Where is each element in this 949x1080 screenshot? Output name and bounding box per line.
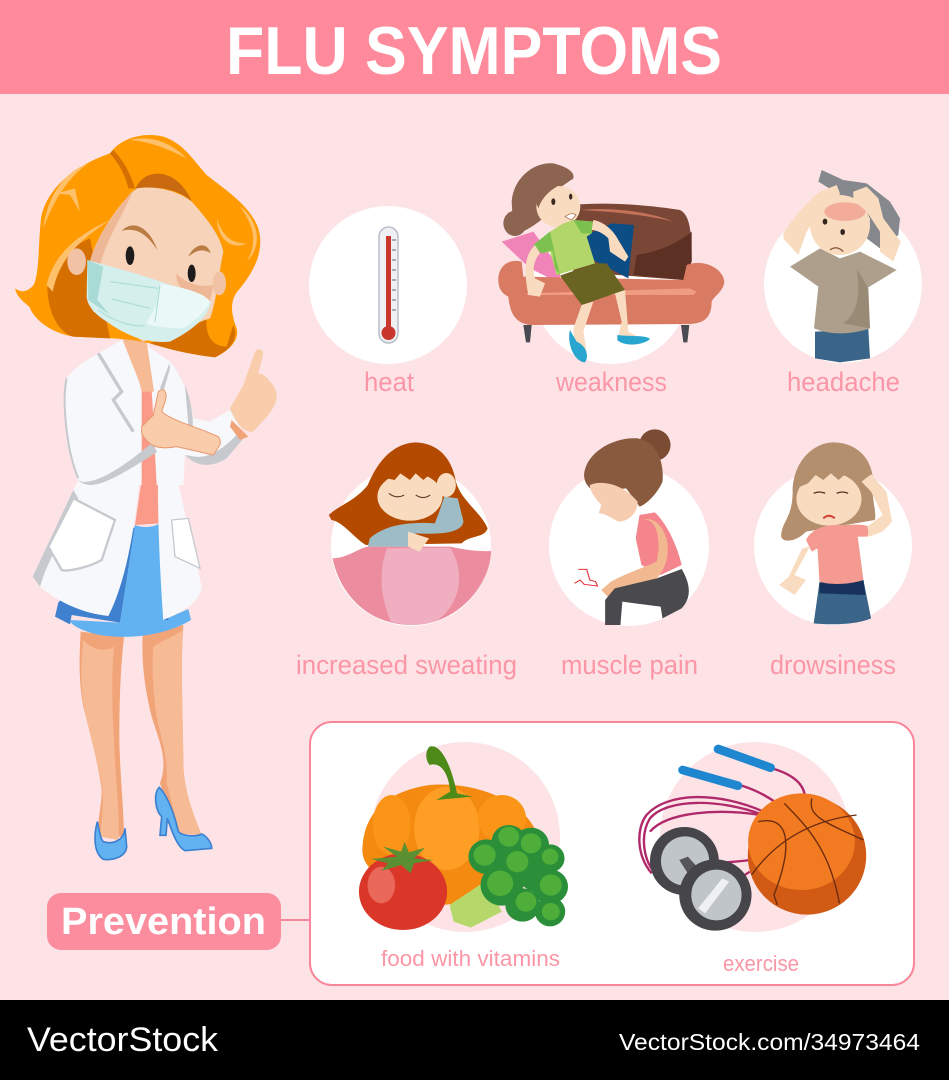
icon: jump rope <box>639 749 805 878</box>
symptom: weakness <box>498 163 724 397</box>
symptom: weakness: weakness <box>555 367 667 397</box>
illustration: person on sofa <box>498 163 724 362</box>
symptom: drowsiness <box>754 442 912 680</box>
illustration: tired girl <box>779 442 892 624</box>
connector line <box>280 919 310 921</box>
symptom: heat <box>309 206 467 397</box>
icon: thermometer <box>379 227 398 343</box>
header band with title: FLU SYMPTOMS <box>226 13 722 89</box>
header band with title <box>0 0 949 94</box>
food with vitamins <box>359 742 568 971</box>
footer watermark bar: VectorStock <box>27 1021 219 1059</box>
symptom: drowsiness: drowsiness <box>770 650 896 680</box>
illustration: man holding head <box>783 170 901 362</box>
symptom: muscle pain <box>549 429 709 680</box>
doctor hands <box>142 349 277 455</box>
doctor upper body and head <box>15 135 260 485</box>
illustration: girl in bed <box>329 442 491 625</box>
prevention label <box>47 893 281 950</box>
doctor lower body <box>33 440 212 860</box>
illustration: pumpkin, tomato, broccoli <box>359 746 568 930</box>
panel: prevention <box>310 722 914 985</box>
doctor sleeve cuff <box>78 443 157 485</box>
exercise <box>639 742 866 976</box>
symptom: heat: heat <box>364 367 414 397</box>
symptom: increased sweating <box>296 442 517 680</box>
doctor character <box>15 135 277 860</box>
food with vitamins: food with vitamins <box>381 946 560 971</box>
icon: dumbbells <box>650 827 752 931</box>
exercise: exercise <box>723 951 799 976</box>
symptom: headache <box>764 170 922 397</box>
footer watermark bar: VectorStock.com/34973464 <box>619 1029 920 1055</box>
symptom: muscle pain: muscle pain <box>561 650 698 680</box>
icon: basketball <box>748 793 866 915</box>
illustration: woman holding knee <box>574 429 689 625</box>
prevention label: Prevention <box>61 901 266 943</box>
symptom: headache: headache <box>787 367 900 397</box>
footer watermark bar <box>0 1000 949 1080</box>
symptom: increased sweating: increased sweating <box>296 650 517 680</box>
